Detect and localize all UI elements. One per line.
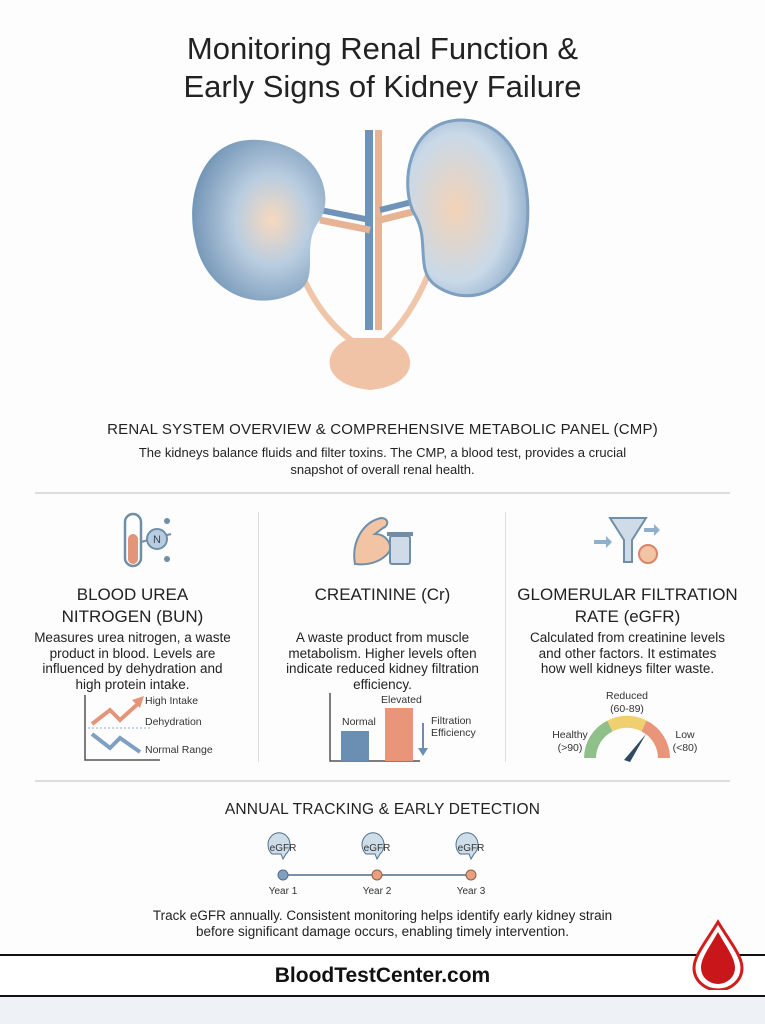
icon: funnel with clock — [594, 517, 660, 564]
timeline: eGFR — [364, 843, 390, 854]
panel: BUN: influenced by dehydration and — [42, 661, 223, 676]
tracking text: before significant damage occurs, enabling timely intervention. — [196, 924, 569, 938]
chart: creatinine bars: Filtration — [431, 715, 471, 727]
chart: eGFR gauge: (>90) — [558, 742, 582, 754]
title — [183, 31, 582, 104]
chart: BUN trend: Normal Range — [145, 744, 213, 756]
panel: BUN: high protein intake. — [75, 676, 190, 692]
panel: BUN: BLOOD UREA — [77, 585, 188, 604]
timeline: eGFR — [458, 843, 484, 854]
timeline: Year 1 — [269, 886, 298, 897]
section heading: annual tracking: ANNUAL TRACKING & EARLY DETECTION — [225, 801, 540, 818]
chart: creatinine bars: Normal — [342, 716, 376, 728]
icon: test tube with N: N — [153, 534, 161, 546]
vessels — [365, 130, 373, 330]
icon: blood drop logo — [692, 919, 744, 990]
chart: eGFR gauge: Reduced — [606, 690, 648, 702]
chart: BUN trend — [84, 695, 213, 761]
tracking text: Track eGFR annually. Consistent monitoring helps identify early kidney strain — [153, 908, 612, 923]
icon: test tube with N — [124, 512, 172, 568]
panel: eGFR: GLOMERULAR FILTRATION — [517, 585, 738, 604]
timeline: Year 2 — [363, 886, 392, 897]
ureters — [300, 270, 358, 345]
panel: eGFR: and other factors. It estimates — [539, 646, 716, 660]
panel: BUN: Measures urea nitrogen, a waste — [34, 630, 231, 645]
chart: eGFR gauge: Healthy — [552, 729, 589, 741]
bladder — [330, 338, 410, 390]
panel: BUN: NITROGEN (BUN) — [62, 607, 203, 626]
panel: BUN — [34, 512, 231, 692]
timeline: Year 3 — [457, 886, 486, 897]
panel: BUN: product in blood. Levels are — [50, 646, 215, 660]
overview text: snapshot of overall renal health. — [290, 462, 475, 477]
overview text: The kidneys balance fluids and filter toxins. The CMP, a blood test, provides a crucial — [139, 445, 626, 460]
timeline: eGFR — [270, 843, 296, 854]
chart: BUN trend: Dehydration — [145, 716, 202, 728]
section heading: overview: RENAL SYSTEM OVERVIEW & COMPREHENSIVE METABOLIC PANEL (CMP) — [107, 421, 658, 438]
panel: eGFR: Calculated from creatinine levels — [530, 630, 725, 645]
chart: eGFR gauge: (<80) — [673, 742, 697, 754]
footer — [0, 954, 765, 997]
icon: arm and trash — [353, 517, 413, 566]
panel: eGFR: RATE (eGFR) — [575, 607, 680, 626]
panel: eGFR — [517, 517, 738, 676]
panel: eGFR: how well kidneys filter waste. — [541, 661, 714, 676]
footer brand text: BloodTestCenter.com — [275, 964, 490, 987]
chart: eGFR gauge: Low — [675, 729, 695, 741]
title: Early Signs of Kidney Failure — [183, 69, 582, 104]
panel: Creatinine: efficiency. — [353, 676, 412, 692]
kidney illustration — [192, 118, 530, 390]
chart: creatinine bars — [329, 693, 476, 762]
panel: Creatinine — [286, 517, 479, 692]
chart: BUN trend: High Intake — [145, 695, 198, 707]
timeline — [268, 832, 486, 897]
title: Monitoring Renal Function & — [187, 31, 578, 66]
chart: eGFR gauge: (60-89) — [610, 703, 644, 715]
chart: creatinine bars: Efficiency — [431, 727, 476, 739]
chart: creatinine bars: Elevated — [381, 694, 422, 706]
overview text — [139, 445, 626, 477]
tracking text — [153, 908, 612, 939]
panel: Creatinine: metabolism. Higher levels often — [288, 646, 477, 660]
panel: Creatinine: indicate reduced kidney filtration — [286, 661, 479, 676]
chart: eGFR gauge — [552, 690, 697, 762]
panel: Creatinine: CREATININE (Cr) — [315, 585, 450, 604]
kidneys — [192, 140, 325, 301]
panel: Creatinine: A waste product from muscle — [296, 630, 469, 645]
